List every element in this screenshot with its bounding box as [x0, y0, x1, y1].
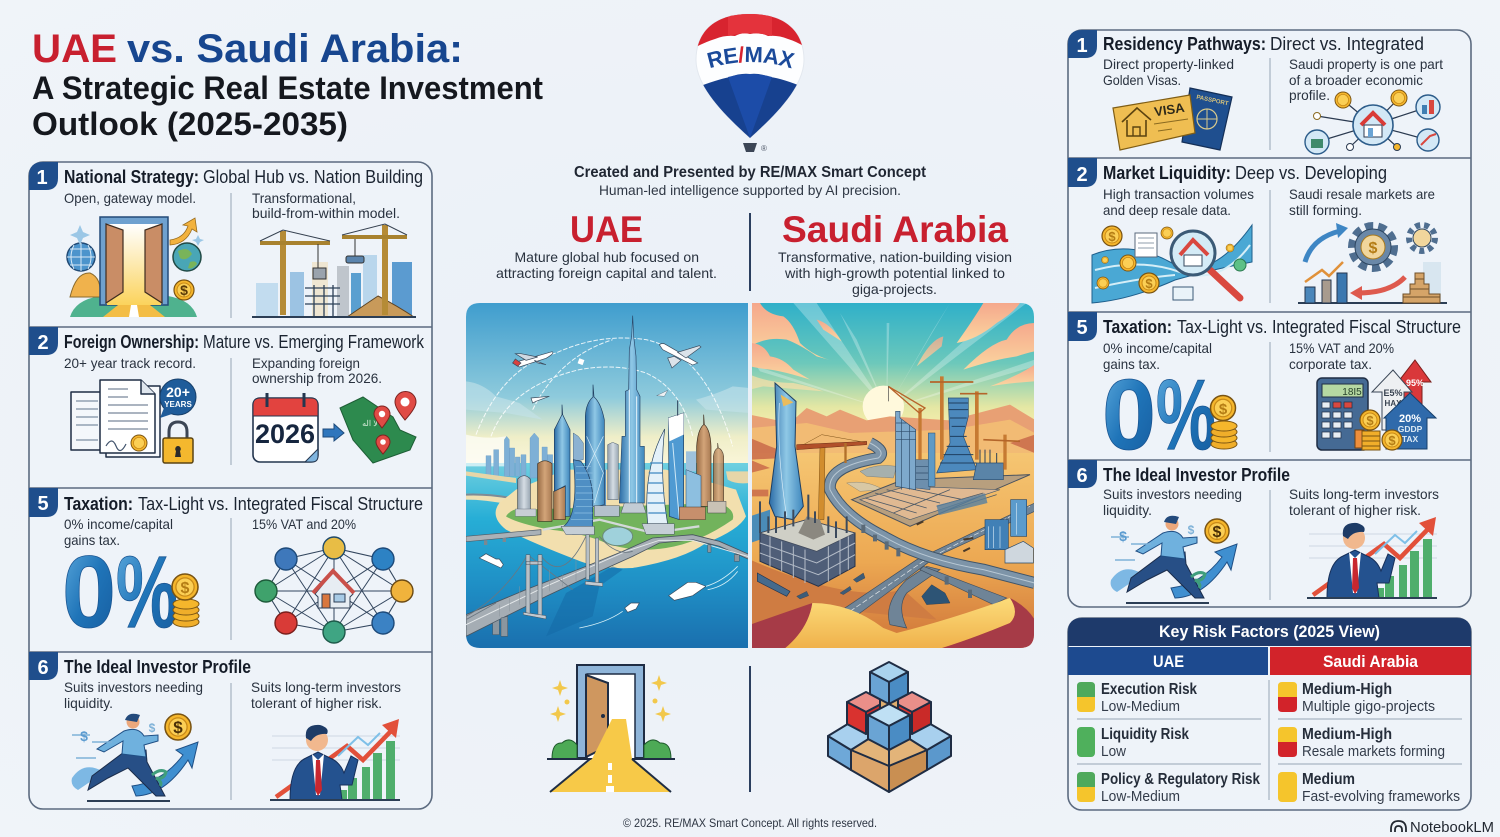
row: market liquidity	[1068, 158, 1447, 303]
icon: zero percent with coins: $	[181, 580, 190, 597]
risk: execution Saudi: Multiple gigo-projects	[1302, 699, 1435, 715]
row: taxation: 15% VAT and 20%	[252, 516, 356, 532]
row: market liquidity: 2	[1076, 164, 1088, 186]
risk: liquidity Saudi	[1278, 726, 1445, 760]
icon: running investor: $	[173, 718, 183, 737]
icon: running investor: $	[1188, 523, 1195, 537]
row: foreign ownership: Expanding foreign	[252, 355, 360, 371]
logo: RE/MAX balloon: ®	[761, 144, 767, 153]
icon: gold visa and passport: VISA	[1153, 100, 1186, 119]
text block: credit line: Created and Presented by RE/MAX Smart Concept	[574, 164, 926, 181]
row: taxation: 5	[37, 493, 49, 515]
row: foreign ownership: Foreign Ownership:	[64, 332, 199, 352]
row: residency pathways: Saudi property is one part	[1289, 56, 1443, 72]
illustration: Saudi construction and desert	[750, 303, 1035, 650]
heading: Saudi Arabia column: with high-growth potential linked to	[784, 265, 1005, 281]
row: ideal investor profile	[29, 652, 401, 801]
row: taxation right: 15% VAT and 20%	[1289, 340, 1394, 356]
row: market liquidity: Market Liquidity:	[1103, 163, 1231, 183]
icon: running investor: $	[149, 721, 156, 735]
icon: calculator and tax arrows	[1317, 360, 1436, 450]
risk: policy Saudi	[1278, 771, 1460, 805]
row: ideal investor profile: tolerant of higher risk.	[251, 695, 382, 711]
row: national strategy: build-from-within model.	[252, 205, 400, 221]
title: vs. Saudi Arabia:	[127, 27, 463, 71]
icon: open door with globe	[67, 217, 204, 317]
icon: investor with growth chart	[1307, 517, 1437, 598]
risk: liquidity UAE	[1077, 726, 1189, 760]
title: Outlook (2025-2035)	[32, 106, 348, 142]
row: taxation: Taxation:	[64, 494, 133, 514]
row: ideal investor profile: Suits investors needing	[64, 679, 203, 695]
icon: documents, badge and lock: YEARS	[164, 400, 192, 409]
column header: UAE	[1068, 647, 1268, 675]
icon: documents, badge and lock: 20+	[166, 384, 190, 400]
heading: UAE column	[496, 209, 717, 281]
risk: policy UAE: Policy & Regulatory Risk	[1101, 771, 1260, 788]
icon: 2026 calendar to Saudi map: 2026	[255, 419, 315, 449]
icon: running investor: $	[1213, 524, 1222, 541]
row: residency pathways: Golden Visas.	[1103, 72, 1181, 88]
icon: property network	[1305, 90, 1440, 154]
heading: UAE column: attracting foreign capital and talent.	[496, 265, 717, 281]
icon: documents, badge and lock	[71, 379, 196, 463]
row: residency pathways: Residency Pathways:	[1103, 34, 1266, 54]
risk: policy UAE: Low-Medium	[1101, 789, 1180, 805]
icon: gears, bars and arrows	[1298, 223, 1447, 303]
row: taxation: Tax-Light vs. Integrated Fiscal Structure	[138, 494, 423, 514]
row: market liquidity: Deep vs. Developing	[1235, 163, 1387, 183]
icon: calculator and tax arrows: 95%	[1406, 378, 1424, 388]
icon: running investor: $	[1119, 528, 1127, 544]
row: taxation: gains tax.	[64, 532, 120, 548]
icon: zero percent with coins: %	[116, 535, 178, 649]
icon: open door with globe: $	[180, 282, 188, 298]
icon: running investor	[72, 714, 198, 801]
risk: liquidity Saudi: Medium-High	[1302, 726, 1392, 743]
icon: zero percent with coins	[1102, 359, 1237, 471]
footer: copyright: © 2025. RE/MAX Smart Concept. All rights reserved.	[623, 816, 877, 830]
row: market liquidity: and deep resale data.	[1103, 202, 1231, 218]
heading: Saudi Arabia column: giga-projects.	[852, 281, 937, 297]
icon: cranes and skyline	[252, 224, 416, 317]
row: ideal investor profile: 6	[37, 657, 49, 679]
risk: policy Saudi: Medium	[1302, 771, 1355, 788]
row: national strategy: National Strategy:	[64, 167, 199, 187]
row: residency pathways: profile.	[1289, 87, 1330, 103]
icon: zero percent with coins: $	[1219, 401, 1228, 418]
row: national strategy	[29, 162, 423, 317]
row: taxation	[29, 488, 423, 649]
icon: zero percent with coins	[62, 535, 199, 649]
icon: tax network around house	[255, 537, 413, 643]
row: foreign ownership: Mature vs. Emerging Framework	[203, 332, 425, 352]
icon: calculator and tax arrows: $	[1388, 433, 1396, 448]
row: ideal investor profile right: tolerant of higher risk.	[1289, 502, 1421, 518]
heading: Saudi Arabia column	[778, 209, 1012, 297]
column header: UAE: UAE	[1153, 653, 1184, 671]
table header: Key Risk Factors (2025 View)	[1159, 623, 1380, 641]
risk: liquidity UAE: Liquidity Risk	[1101, 726, 1189, 743]
row: taxation right: corporate tax.	[1289, 356, 1372, 372]
icon: gold visa and passport	[1113, 88, 1232, 150]
row: national strategy: Open, gateway model.	[64, 190, 196, 206]
footer: NotebookLM mark: NotebookLM	[1410, 819, 1494, 836]
heading: UAE column: Mature global hub focused on	[514, 249, 699, 265]
row: residency pathways: of a broader economic	[1289, 72, 1423, 88]
row: taxation right: Taxation:	[1103, 317, 1172, 337]
icon: calculator and tax arrows: 18I5	[1342, 387, 1362, 398]
icon: calculator and tax arrows: HAX	[1385, 399, 1402, 408]
row: ideal investor profile: liquidity.	[64, 695, 113, 711]
icon: zero percent with coins: 0	[62, 535, 116, 649]
risk: execution UAE: Low-Medium	[1101, 699, 1180, 715]
icon: calculator and tax arrows: 20%	[1399, 413, 1421, 425]
row: taxation right: gains tax.	[1103, 356, 1160, 372]
row: national strategy: Global Hub vs. Nation Building	[203, 167, 423, 187]
row: ideal investor profile right: Suits long-term investors	[1289, 486, 1439, 502]
icon: stacked building blocks	[828, 662, 951, 792]
risk: execution UAE	[1077, 681, 1197, 715]
icon: running investor	[1111, 516, 1237, 603]
row: market liquidity: High transaction volumes	[1103, 186, 1254, 202]
title: A Strategic Real Estate Investment	[32, 70, 543, 106]
row: residency pathways: Direct vs. Integrated	[1270, 34, 1424, 54]
illustration: UAE skyline and bridge	[466, 303, 750, 648]
icon: 2026 calendar to Saudi map	[253, 392, 416, 463]
icon: calculator and tax arrows: $	[1366, 413, 1374, 428]
risk: execution Saudi	[1278, 681, 1435, 715]
icon: 2026 calendar to Saudi map: لا اله	[362, 419, 378, 428]
row: ideal investor profile right: 6	[1076, 465, 1088, 487]
icon: calculator and tax arrows: E5%	[1383, 388, 1403, 398]
row: residency pathways: Direct property-linked	[1103, 56, 1234, 72]
icon: liquidity wave with magnifier: $	[1108, 229, 1116, 244]
icon: running investor: $	[80, 728, 88, 744]
row: taxation right: 5	[1076, 317, 1088, 339]
column header: Saudi Arabia: Saudi Arabia	[1323, 653, 1419, 671]
row: taxation right	[1068, 312, 1461, 471]
risk: policy UAE	[1077, 771, 1260, 805]
row: ideal investor profile: The Ideal Investor Profile	[64, 657, 251, 677]
row: residency pathways	[1068, 30, 1443, 154]
risk: policy Saudi: Fast-evolving frameworks	[1302, 789, 1460, 805]
row: ideal investor profile right: liquidity.	[1103, 502, 1152, 518]
icon: calculator and tax arrows: TAX	[1402, 434, 1419, 444]
row: market liquidity: Saudi resale markets are	[1289, 186, 1435, 202]
icon: investor with growth chart	[270, 719, 400, 800]
row: foreign ownership: ownership from 2026.	[252, 370, 382, 386]
table header	[1068, 618, 1471, 646]
icon: liquidity wave with magnifier: $	[1145, 276, 1153, 291]
text block: credit line	[574, 164, 926, 198]
row: foreign ownership: 2	[37, 332, 49, 354]
row: national strategy: 1	[36, 167, 48, 189]
row: ideal investor profile right: Suits investors needing	[1103, 486, 1242, 502]
panel: right comparison factors	[1068, 30, 1471, 607]
logo: RE/MAX balloon: RE/MAX	[707, 46, 795, 68]
panel: left comparison factors	[29, 162, 432, 809]
row: ideal investor profile: Suits long-term investors	[251, 679, 401, 695]
title: UAE	[32, 27, 117, 71]
row: taxation: 0% income/capital	[64, 516, 173, 532]
panel: key risk factors	[1068, 618, 1471, 810]
icon: gold visa and passport: PASSPORT	[1196, 95, 1229, 107]
risk: execution Saudi: Medium-High	[1302, 681, 1392, 698]
heading: UAE column: UAE	[570, 209, 643, 250]
icon: open door and road	[547, 665, 675, 792]
icon: zero percent with coins: %	[1156, 359, 1216, 471]
risk: liquidity UAE: Low	[1101, 744, 1126, 760]
icon: gears, bars and arrows: $	[1369, 240, 1378, 257]
row: market liquidity: still forming.	[1289, 202, 1362, 218]
row: ideal investor profile right	[1068, 460, 1439, 603]
risk: execution UAE: Execution Risk	[1101, 681, 1197, 698]
risk: liquidity Saudi: Resale markets forming	[1302, 744, 1445, 760]
row: foreign ownership	[29, 327, 425, 463]
icon: calculator and tax arrows: GDDP	[1398, 424, 1423, 434]
row: foreign ownership: 20+ year track record.	[64, 355, 196, 371]
row: taxation right: 0% income/capital	[1103, 340, 1212, 356]
column header: Saudi Arabia	[1270, 647, 1471, 675]
heading: Saudi Arabia column: Transformative, nation-building vision	[778, 249, 1012, 265]
title	[32, 27, 543, 142]
row: national strategy: Transformational,	[252, 190, 356, 206]
icon: zero percent with coins: 0	[1102, 359, 1156, 471]
row: residency pathways: 1	[1076, 35, 1088, 57]
logo: RE/MAX balloon	[696, 14, 804, 153]
row: taxation right: Tax-Light vs. Integrated Fiscal Structure	[1177, 317, 1461, 337]
heading: Saudi Arabia column: Saudi Arabia	[782, 209, 1008, 250]
icon: liquidity wave with magnifier	[1092, 225, 1252, 303]
text block: credit line: Human-led intelligence supported by AI precision.	[599, 182, 901, 198]
row: ideal investor profile right: The Ideal Investor Profile	[1103, 465, 1290, 485]
